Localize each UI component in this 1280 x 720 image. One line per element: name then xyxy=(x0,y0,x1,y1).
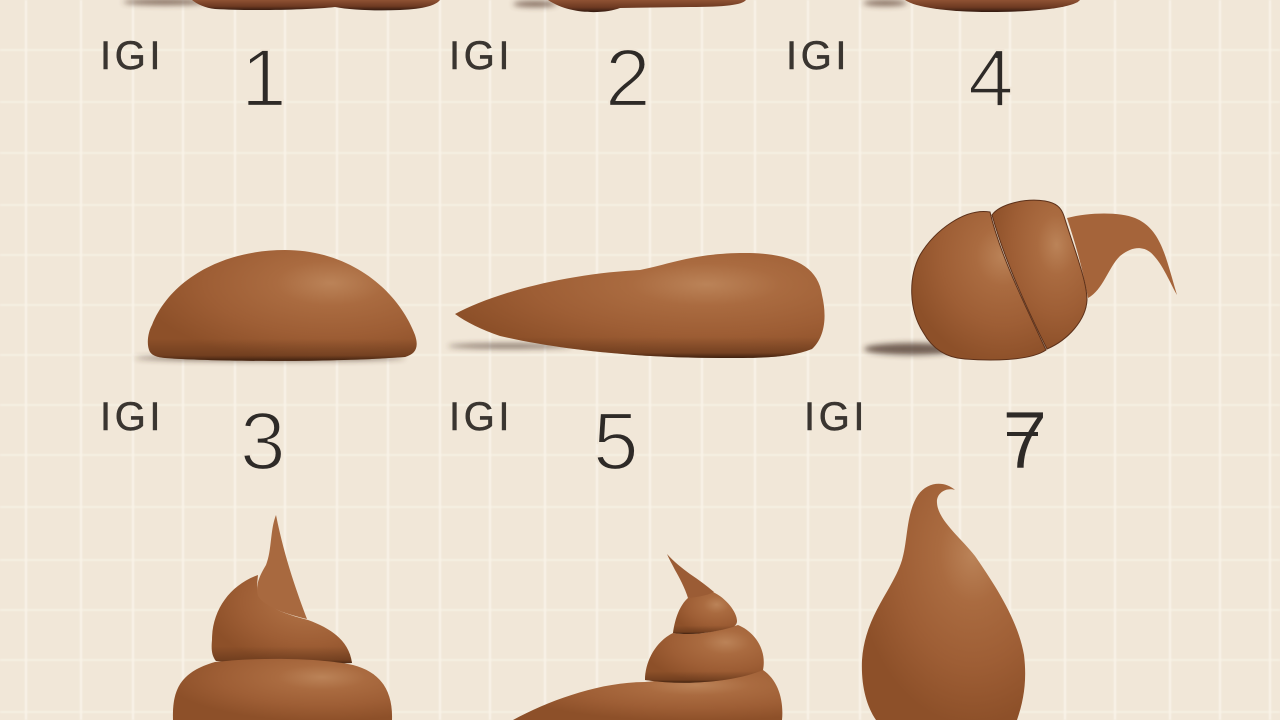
left segment xyxy=(912,212,1046,360)
shape 4: cropped form, top right xyxy=(863,0,1080,12)
label: IGI above 1: IGI xyxy=(100,34,164,78)
tip xyxy=(667,554,714,598)
number 3: 3 xyxy=(240,396,286,487)
number 4: 4 xyxy=(968,33,1014,124)
top tier xyxy=(673,592,737,634)
base tier xyxy=(173,659,392,720)
drop form, bottom right xyxy=(862,484,1025,720)
tip xyxy=(257,515,307,619)
number 1: 1 xyxy=(241,33,287,124)
number 5: 5 xyxy=(593,396,639,487)
tail xyxy=(1067,214,1177,298)
shape 5: carrot xyxy=(448,253,825,358)
number 7 with double bar: 7 xyxy=(1002,395,1048,486)
shape 2: cropped form, top centre xyxy=(513,0,746,12)
label: IGI above 7: IGI xyxy=(804,395,868,439)
label: IGI above 4: IGI xyxy=(786,34,850,78)
shape 1: cropped form, top left xyxy=(123,0,440,10)
swirl with long tail, bottom centre xyxy=(513,554,782,720)
label: IGI above 2: IGI xyxy=(449,34,513,78)
tail body xyxy=(513,670,782,720)
middle tier xyxy=(645,625,764,683)
label: IGI above 3: IGI xyxy=(100,395,164,439)
label: IGI above 5: IGI xyxy=(449,395,513,439)
swirl form, bottom left xyxy=(173,515,392,720)
shape 3: dome xyxy=(135,250,417,361)
number 2: 2 xyxy=(605,33,651,124)
middle tier xyxy=(212,575,352,664)
shape 6: croissant with curled tail xyxy=(864,200,1177,360)
middle segment xyxy=(992,200,1087,349)
